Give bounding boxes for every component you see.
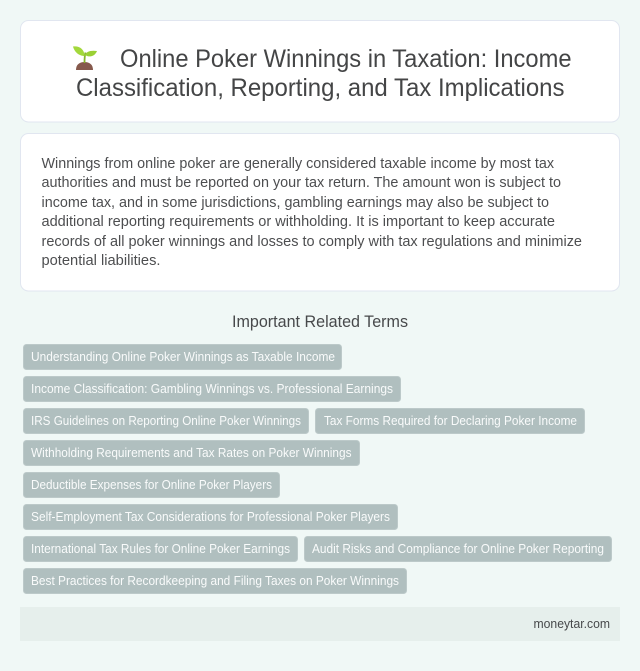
tag — [24, 568, 406, 594]
panel: description: income tax, and in some jurisdictions, gambling earnings may also be subject to — [42, 194, 549, 211]
panel: description: records of all poker winnings and losses to comply with tax regulations and minimize — [42, 233, 582, 250]
tag: Tax Forms Required for Declaring Poker Income — [324, 413, 577, 428]
tag: IRS Guidelines on Reporting Online Poker Winnings — [31, 413, 301, 428]
panel: description: potential liabilities. — [42, 252, 160, 269]
tag: Understanding Online Poker Winnings as Taxable Income — [31, 349, 335, 364]
icon: seedling — [73, 46, 97, 70]
tag: Withholding Requirements and Tax Rates on Poker Winnings — [31, 445, 352, 460]
panel: description — [20, 134, 620, 291]
panel: description: Winnings from online poker are generally considered taxable income by most tax — [42, 155, 554, 172]
tag list — [24, 344, 612, 594]
tag — [304, 536, 612, 562]
title text — [76, 45, 572, 102]
tag: Self-Employment Tax Considerations for Professional Poker Players — [31, 509, 390, 524]
tag: International Tax Rules for Online Poker Earnings — [31, 541, 290, 556]
tag — [24, 472, 280, 498]
heading: important related terms: Important Related Terms — [232, 313, 408, 331]
tag: Audit Risks and Compliance for Online Poker Reporting — [312, 541, 604, 556]
tag — [24, 536, 298, 562]
tag — [24, 376, 400, 402]
tag — [24, 408, 308, 434]
tag: Best Practices for Recordkeeping and Filing Taxes on Poker Winnings — [31, 573, 399, 588]
title text: Online Poker Winnings in Taxation: Income — [120, 45, 572, 73]
tag — [24, 440, 360, 466]
panel: title card — [20, 20, 620, 122]
tag — [24, 504, 398, 530]
tag: Income Classification: Gambling Winnings vs. Professional Earnings — [31, 381, 393, 396]
tag — [316, 408, 584, 434]
panel: description: authorities and must be reported on your tax return. The amount won is subject to — [42, 174, 561, 191]
footer — [20, 607, 620, 641]
tag — [24, 344, 342, 370]
tag: Deductible Expenses for Online Poker Players — [31, 477, 272, 492]
panel: description: additional reporting requirements or withholding. It is important to keep accurate — [42, 213, 555, 230]
footer: moneytar.com — [534, 616, 610, 631]
title text: Classification, Reporting, and Tax Implications — [76, 74, 564, 102]
